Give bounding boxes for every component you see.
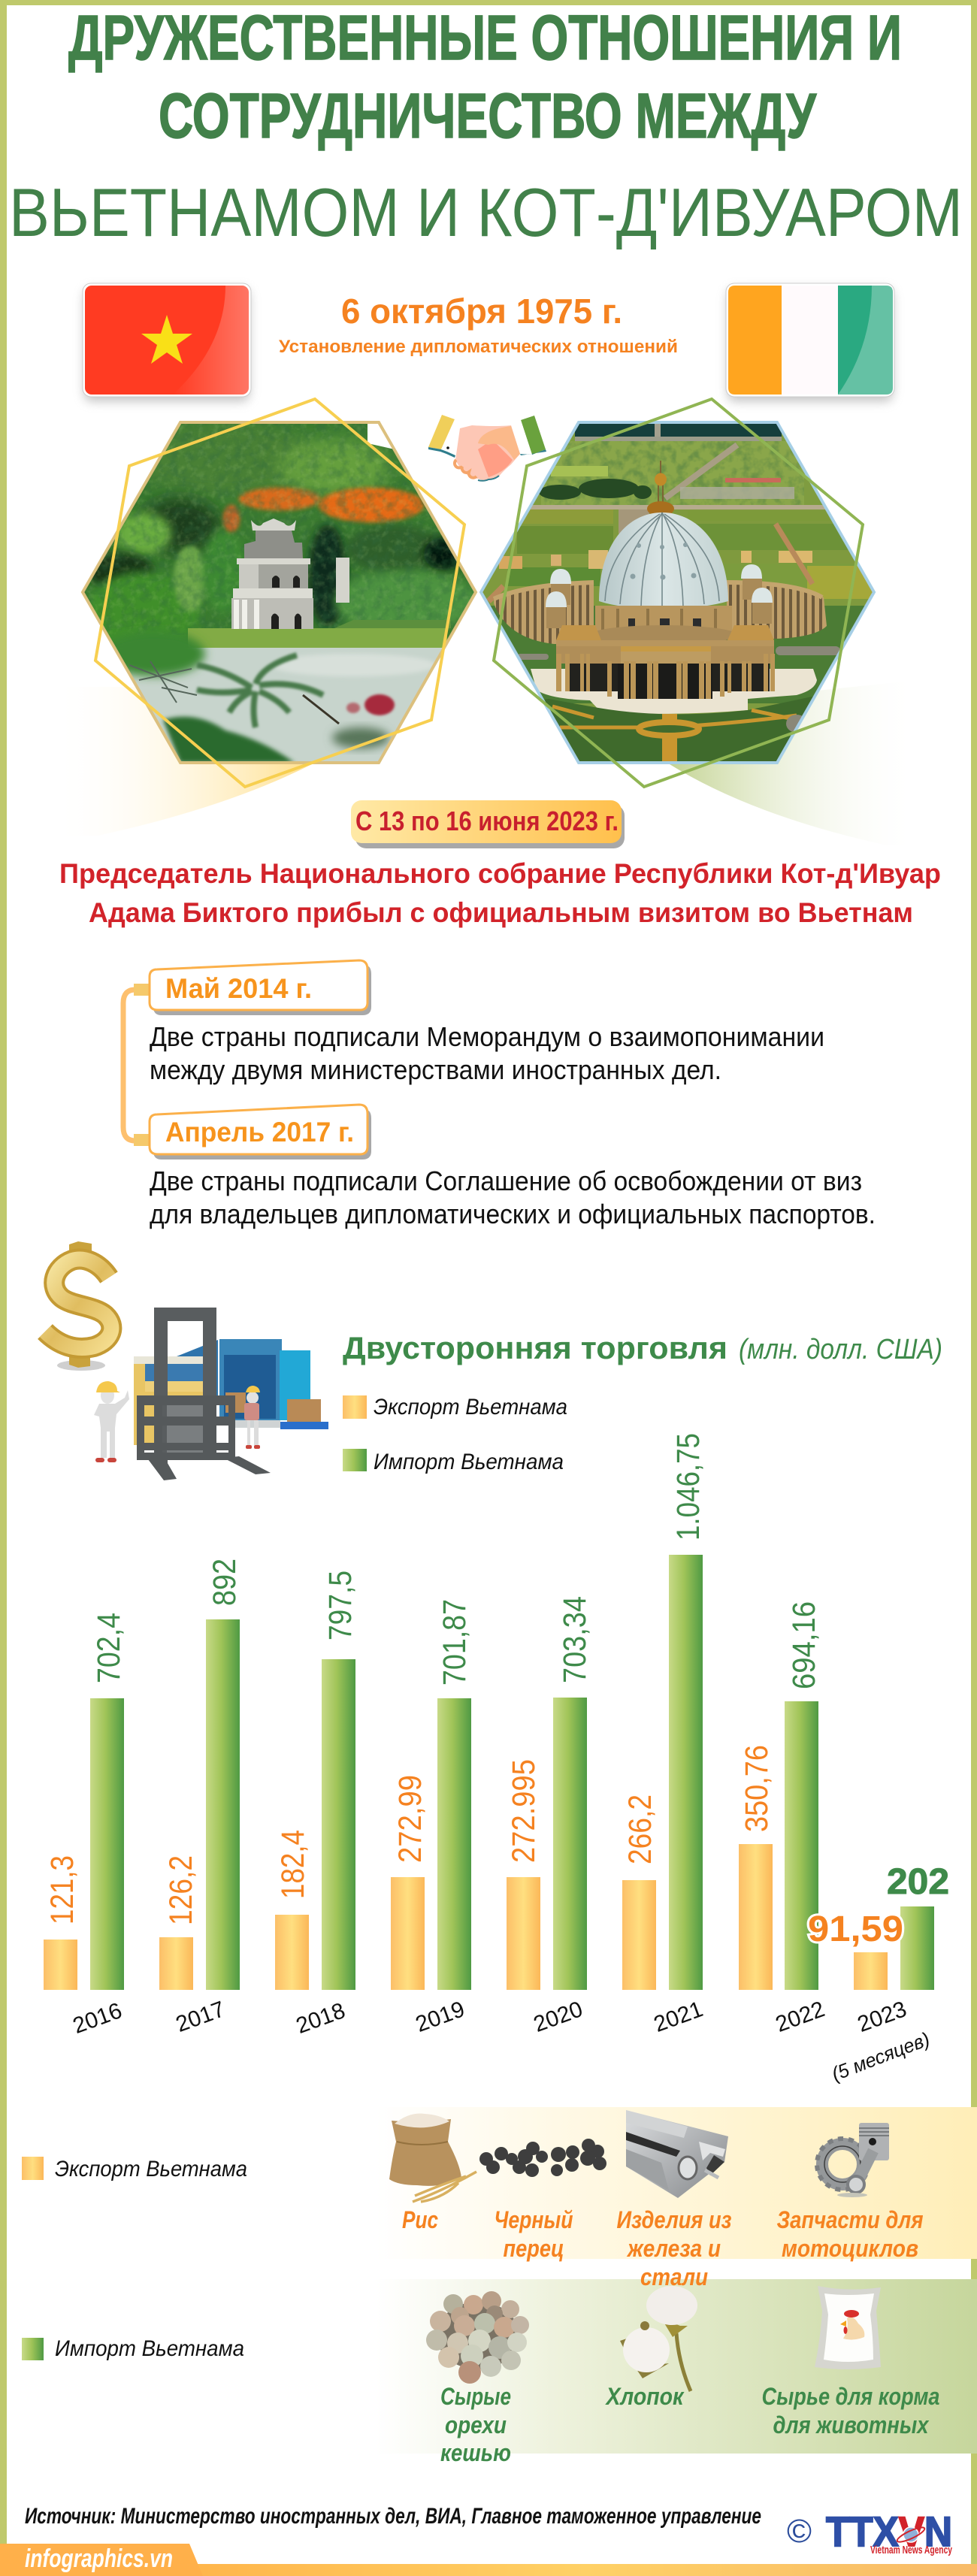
photo: Yamoussoukro basilica — [479, 421, 876, 765]
chart legend — [343, 1395, 567, 1474]
date: establishment of relations: 6 октября 1975 г. — [341, 292, 622, 331]
export goods labels: Изделия из — [616, 2206, 732, 2233]
title — [9, 2, 963, 251]
tower — [231, 519, 349, 629]
trees — [86, 421, 478, 653]
export goods labels: мотоциклов — [782, 2235, 918, 2262]
hexagon outline: green — [494, 399, 863, 787]
date: establishment of relations: Установление дипломатических отношений — [279, 337, 678, 357]
icon: cotton — [620, 2286, 697, 2391]
import values: 702,4 — [91, 1613, 127, 1683]
text: memorandum: между двумя министерствами иностранных дел. — [150, 1054, 721, 1085]
export goods labels: железа и — [626, 2235, 721, 2262]
import values: 892 — [207, 1559, 243, 1606]
export values: 350,76 — [739, 1745, 775, 1832]
import goods labels: Сырье для корма — [762, 2383, 939, 2410]
chart legend: Экспорт Вьетнама — [374, 1395, 567, 1420]
icon: rice sack — [389, 2114, 476, 2202]
export goods labels: стали — [640, 2263, 708, 2290]
flag: Vietnam — [83, 283, 251, 401]
chart heading — [343, 1330, 942, 1365]
main dome — [599, 512, 728, 609]
import goods labels: для животных — [773, 2411, 930, 2438]
drum — [595, 606, 732, 640]
photo outline: left — [83, 422, 476, 763]
glow: yellow behind left photo — [53, 687, 312, 836]
bar chart: 91,59 — [808, 1909, 903, 1949]
footer strip — [0, 2564, 977, 2576]
import values: 1.046,75 — [670, 1433, 706, 1540]
portico — [556, 625, 775, 699]
year labels: 2020 — [531, 1997, 586, 2037]
date: establishment of relations — [279, 292, 678, 357]
export values: 266,2 — [622, 1794, 658, 1864]
fields — [481, 505, 876, 606]
legend: import: Импорт Вьетнама — [55, 2336, 244, 2361]
export goods labels: перец — [504, 2235, 564, 2262]
year labels: 2022 — [773, 1997, 828, 2037]
headline: visit: Председатель Национального собрание Республики Кот-д'Ивуар — [59, 858, 941, 889]
lower lawn right — [481, 606, 876, 703]
flag: Cote d'Ivoire — [726, 283, 894, 401]
icon: handshake — [428, 415, 546, 481]
plaza — [531, 669, 817, 714]
icon: motorcycle parts — [817, 2123, 889, 2197]
countryside — [539, 422, 804, 505]
icon: black pepper — [479, 2139, 606, 2177]
text: memorandum — [150, 1021, 824, 1085]
legend: export: Экспорт Вьетнама — [55, 2157, 247, 2181]
highlighted 2023 values: 202 — [887, 1862, 949, 1902]
sky corner — [368, 424, 392, 449]
year labels: 2018 — [293, 1998, 349, 2039]
headline: visit: Адама Биктого прибыл с официальным визитом во Вьетнам — [89, 897, 913, 928]
import values: 797,5 — [322, 1571, 358, 1640]
import goods labels: Хлопок — [605, 2383, 685, 2410]
export values — [44, 1745, 775, 1925]
export goods labels — [402, 2206, 924, 2290]
glow: green behind right photo — [670, 680, 918, 845]
import bars — [90, 1555, 934, 1990]
photo: Hanoi Turtle Tower — [81, 421, 478, 765]
year labels — [70, 1997, 933, 2085]
bar chart — [44, 1433, 949, 2085]
text: visa agreement — [150, 1166, 876, 1229]
chart heading: (млн. долл. США) — [739, 1334, 942, 1365]
year labels: 2016 — [70, 1998, 126, 2039]
timeline connector — [123, 984, 150, 1146]
timeline label: April 2017 — [150, 1105, 371, 1160]
blossoms — [223, 488, 424, 532]
hexagon outline: yellow — [95, 399, 464, 787]
import values — [91, 1433, 822, 1689]
export values: 126,2 — [163, 1855, 199, 1925]
export values: 182,4 — [275, 1830, 311, 1899]
import goods labels: орехи — [445, 2411, 507, 2438]
timeline label: April 2017: Апрель 2017 г. — [165, 1117, 354, 1147]
chart heading: Двусторонняя торговля — [343, 1330, 727, 1365]
icon: cashew nuts — [426, 2291, 529, 2384]
import goods labels: Сырые — [440, 2383, 511, 2410]
band: export goods — [376, 2107, 977, 2259]
icon: feed bag — [815, 2286, 881, 2369]
text: memorandum: Две страны подписали Меморандум о взаимопонимании — [150, 1021, 824, 1052]
small domes — [546, 564, 773, 628]
grass — [188, 620, 451, 649]
worker left — [94, 1381, 129, 1462]
spire — [647, 461, 674, 516]
export goods labels: Рис — [402, 2206, 438, 2233]
date badge — [351, 800, 625, 848]
colonnade wings — [494, 581, 827, 644]
chart legend: Импорт Вьетнама — [374, 1450, 564, 1474]
lake — [120, 648, 445, 765]
year labels: (5 месяцев) — [828, 2027, 933, 2085]
export goods labels: Черный — [495, 2206, 573, 2233]
icon: gold dollar — [45, 1241, 111, 1371]
icon: forklift and container — [94, 1314, 328, 1480]
icon: steel products — [626, 2110, 728, 2198]
year labels: 2023 — [854, 1997, 910, 2037]
foreground foliage — [103, 631, 395, 763]
text: visa agreement: для владельцев дипломатических и официальных паспортов. — [150, 1199, 876, 1229]
import values: 701,87 — [437, 1599, 473, 1686]
import values: 694,16 — [786, 1601, 822, 1689]
photo outline: right — [481, 422, 874, 763]
export goods labels: Запчасти для — [777, 2206, 924, 2233]
chicken — [840, 2310, 864, 2340]
source: Источник: Министерство иностранных дел, ВИА, Главное таможенное управление — [25, 2504, 761, 2529]
headline: visit — [59, 858, 941, 928]
export values: 272.995 — [506, 1759, 542, 1863]
text: visa agreement: Две страны подписали Соглашение об освобождении от виз — [150, 1166, 862, 1196]
band: import goods — [376, 2279, 977, 2454]
year labels: 2021 — [651, 1997, 706, 2037]
year labels: 2017 — [173, 1997, 228, 2037]
logo: TTXVN: © — [787, 2513, 812, 2550]
timeline label: May 2014 — [150, 960, 371, 1015]
export values: 121,3 — [44, 1855, 80, 1924]
import goods labels — [440, 2383, 939, 2466]
import values: 703,34 — [557, 1596, 593, 1683]
timeline label: May 2014: Май 2014 г. — [165, 973, 312, 1004]
lawn and paths — [544, 697, 813, 761]
logo: TTXVN: TTXVN — [826, 2508, 952, 2555]
export bars — [44, 1844, 888, 1990]
worker right — [244, 1386, 260, 1449]
export values: 272,99 — [392, 1775, 428, 1863]
year labels: 2019 — [413, 1997, 468, 2037]
date badge: С 13 по 16 июня 2023 г. — [355, 806, 619, 836]
import goods labels: кешью — [440, 2439, 511, 2466]
footer tab: infographics.vn: infographics.vn — [25, 2544, 173, 2573]
